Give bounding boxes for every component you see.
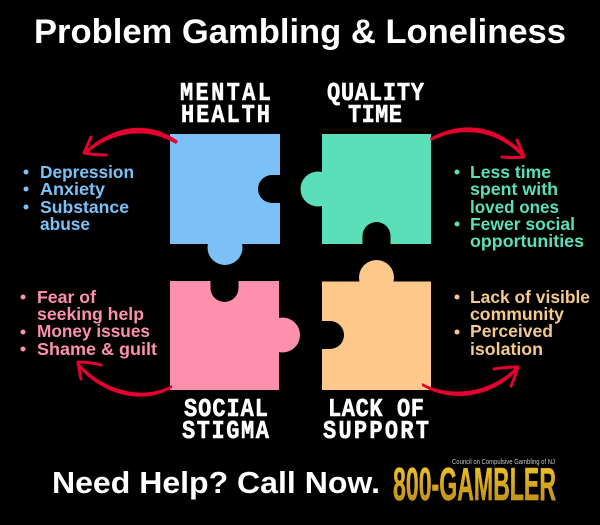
list: lack of support: Lack of visible — [470, 287, 590, 307]
puzzle piece: green — [300, 134, 431, 250]
heading: mental health: HEALTH — [181, 102, 270, 131]
list: lack of support: community — [470, 304, 564, 324]
list: quality time: loved ones — [470, 197, 559, 217]
heading: mental health: MENTAL — [180, 80, 271, 109]
puzzle piece: pink — [170, 274, 300, 390]
list: lack of support — [454, 287, 590, 359]
heading: mental health — [180, 80, 271, 131]
list: quality time: opportunities — [470, 231, 584, 251]
panel: mental health — [24, 80, 286, 265]
puzzle piece: orange — [316, 260, 431, 390]
list: quality time: Fewer social — [470, 214, 575, 234]
puzzle piece: blue — [170, 134, 286, 265]
heading: quality time: TIME — [348, 102, 402, 131]
list: mental health: Substance — [40, 197, 129, 217]
list: lack of support: isolation — [470, 339, 543, 359]
arrow: quality time — [430, 127, 525, 158]
panel: lack of support — [316, 260, 590, 447]
list: social stigma — [20, 287, 157, 359]
heading: quality time: QUALITY — [327, 80, 425, 109]
call to action: Need Help? Call Now. — [52, 466, 380, 500]
list: quality time — [454, 162, 584, 251]
list: mental health: Anxiety — [40, 179, 105, 199]
list: quality time: Less time — [470, 162, 551, 182]
list: lack of support: Perceived — [470, 321, 553, 341]
heading: lack of support: SUPPORT — [323, 418, 429, 447]
logo: 800-GAMBLER: Council on Compulsive Gambling of NJ — [452, 457, 555, 466]
arrow: social stigma — [76, 362, 172, 397]
arrow: mental health — [84, 128, 178, 155]
heading: lack of support — [323, 396, 429, 447]
heading: social stigma: SOCIAL — [184, 396, 268, 425]
list: social stigma: seeking help — [37, 304, 144, 324]
list: quality time: spent with — [470, 179, 558, 199]
panel: quality time — [300, 80, 584, 251]
title: Problem Gambling & Loneliness — [34, 13, 566, 51]
list: mental health: abuse — [40, 214, 90, 234]
list: social stigma: Money issues — [37, 321, 150, 341]
heading: quality time — [327, 80, 425, 131]
list: mental health — [24, 162, 134, 234]
arrow: lack of support — [422, 366, 519, 396]
heading: social stigma: STIGMA — [182, 418, 270, 447]
list: social stigma: Fear of — [37, 287, 96, 307]
list: mental health: Depression — [40, 162, 134, 182]
heading: social stigma — [182, 396, 270, 447]
panel: social stigma — [20, 274, 300, 447]
list: social stigma: Shame & guilt — [37, 339, 157, 359]
heading: lack of support: LACK OF — [328, 396, 424, 425]
